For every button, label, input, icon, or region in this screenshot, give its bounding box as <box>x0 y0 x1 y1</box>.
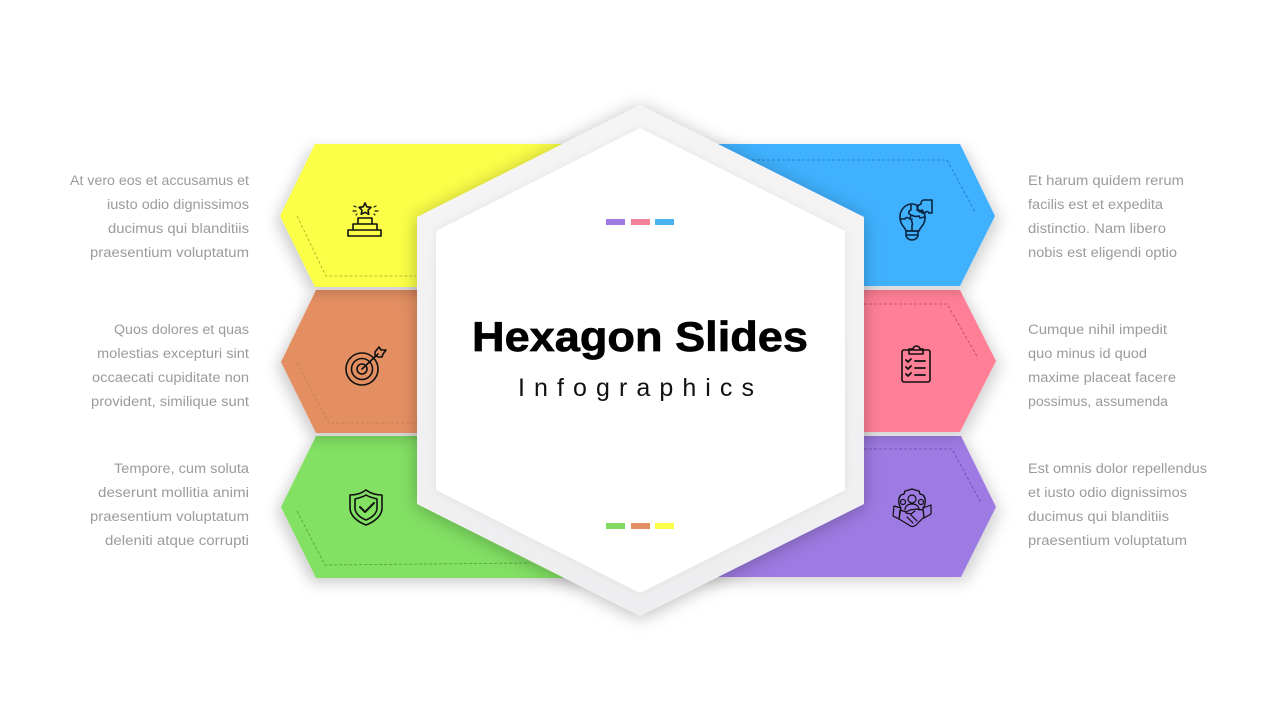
text: pink panel <box>1028 322 1176 409</box>
text: orange panel: occaecati cupiditate non <box>92 370 249 385</box>
text: yellow panel: At vero eos et accusamus et <box>70 173 249 188</box>
text: yellow panel: praesentium voluptatum <box>90 245 249 260</box>
icon: puzzle light bulb <box>900 200 932 240</box>
text: purple panel <box>1028 461 1207 548</box>
subtitle: Infographics <box>518 374 754 402</box>
text: yellow panel: ducimus qui blanditiis <box>108 221 249 236</box>
text: green panel: Tempore, cum soluta <box>114 461 250 476</box>
text: blue panel: nobis est eligendi optio <box>1028 245 1177 260</box>
right panel: purple <box>690 436 996 577</box>
text: purple panel: ducimus qui blanditiis <box>1028 509 1169 524</box>
text: purple panel: praesentium voluptatum <box>1028 533 1187 548</box>
left panel: orange <box>281 290 450 433</box>
icon: podium with star <box>348 203 381 236</box>
icon: shield with check <box>350 490 382 525</box>
text: pink panel: maxime placeat facere <box>1028 370 1176 385</box>
text: orange panel: molestias excepturi sint <box>97 346 249 361</box>
text: blue panel: facilis est et expedita <box>1028 197 1164 212</box>
text: yellow panel <box>70 173 249 260</box>
icon: team gear handshake <box>893 489 931 526</box>
text: green panel: deleniti atque corrupti <box>105 533 249 548</box>
left panel: yellow <box>280 144 590 287</box>
icon: clipboard checklist <box>902 346 930 382</box>
text: pink panel: possimus, assumenda <box>1028 394 1168 409</box>
text: orange panel: provident, similique sunt <box>91 394 249 409</box>
central hexagon <box>417 105 864 616</box>
text: green panel: deserunt mollitia animi <box>98 485 249 500</box>
text: blue panel <box>1028 173 1184 260</box>
text: pink panel: quo minus id quod <box>1028 346 1147 361</box>
text: green panel <box>90 461 250 548</box>
text: blue panel: distinctio. Nam libero <box>1028 221 1166 236</box>
text: blue panel: Et harum quidem rerum <box>1028 173 1184 188</box>
text: yellow panel: iusto odio dignissimos <box>107 197 249 212</box>
right panel: blue <box>690 144 995 286</box>
top colour bars <box>606 219 674 225</box>
text: green panel: praesentium voluptatum <box>90 509 249 524</box>
text: orange panel: Quos dolores et quas <box>114 322 249 337</box>
text: purple panel: et iusto odio dignissimos <box>1028 485 1187 500</box>
icon: target with arrow <box>346 347 386 385</box>
bottom colour bars <box>606 523 674 529</box>
text: orange panel <box>91 322 249 409</box>
title: Hexagon Slides <box>472 313 808 360</box>
right panel: pink <box>830 290 996 432</box>
left panel: green <box>281 436 590 578</box>
text: purple panel: Est omnis dolor repellendus <box>1028 461 1207 476</box>
text: pink panel: Cumque nihil impedit <box>1028 322 1167 337</box>
